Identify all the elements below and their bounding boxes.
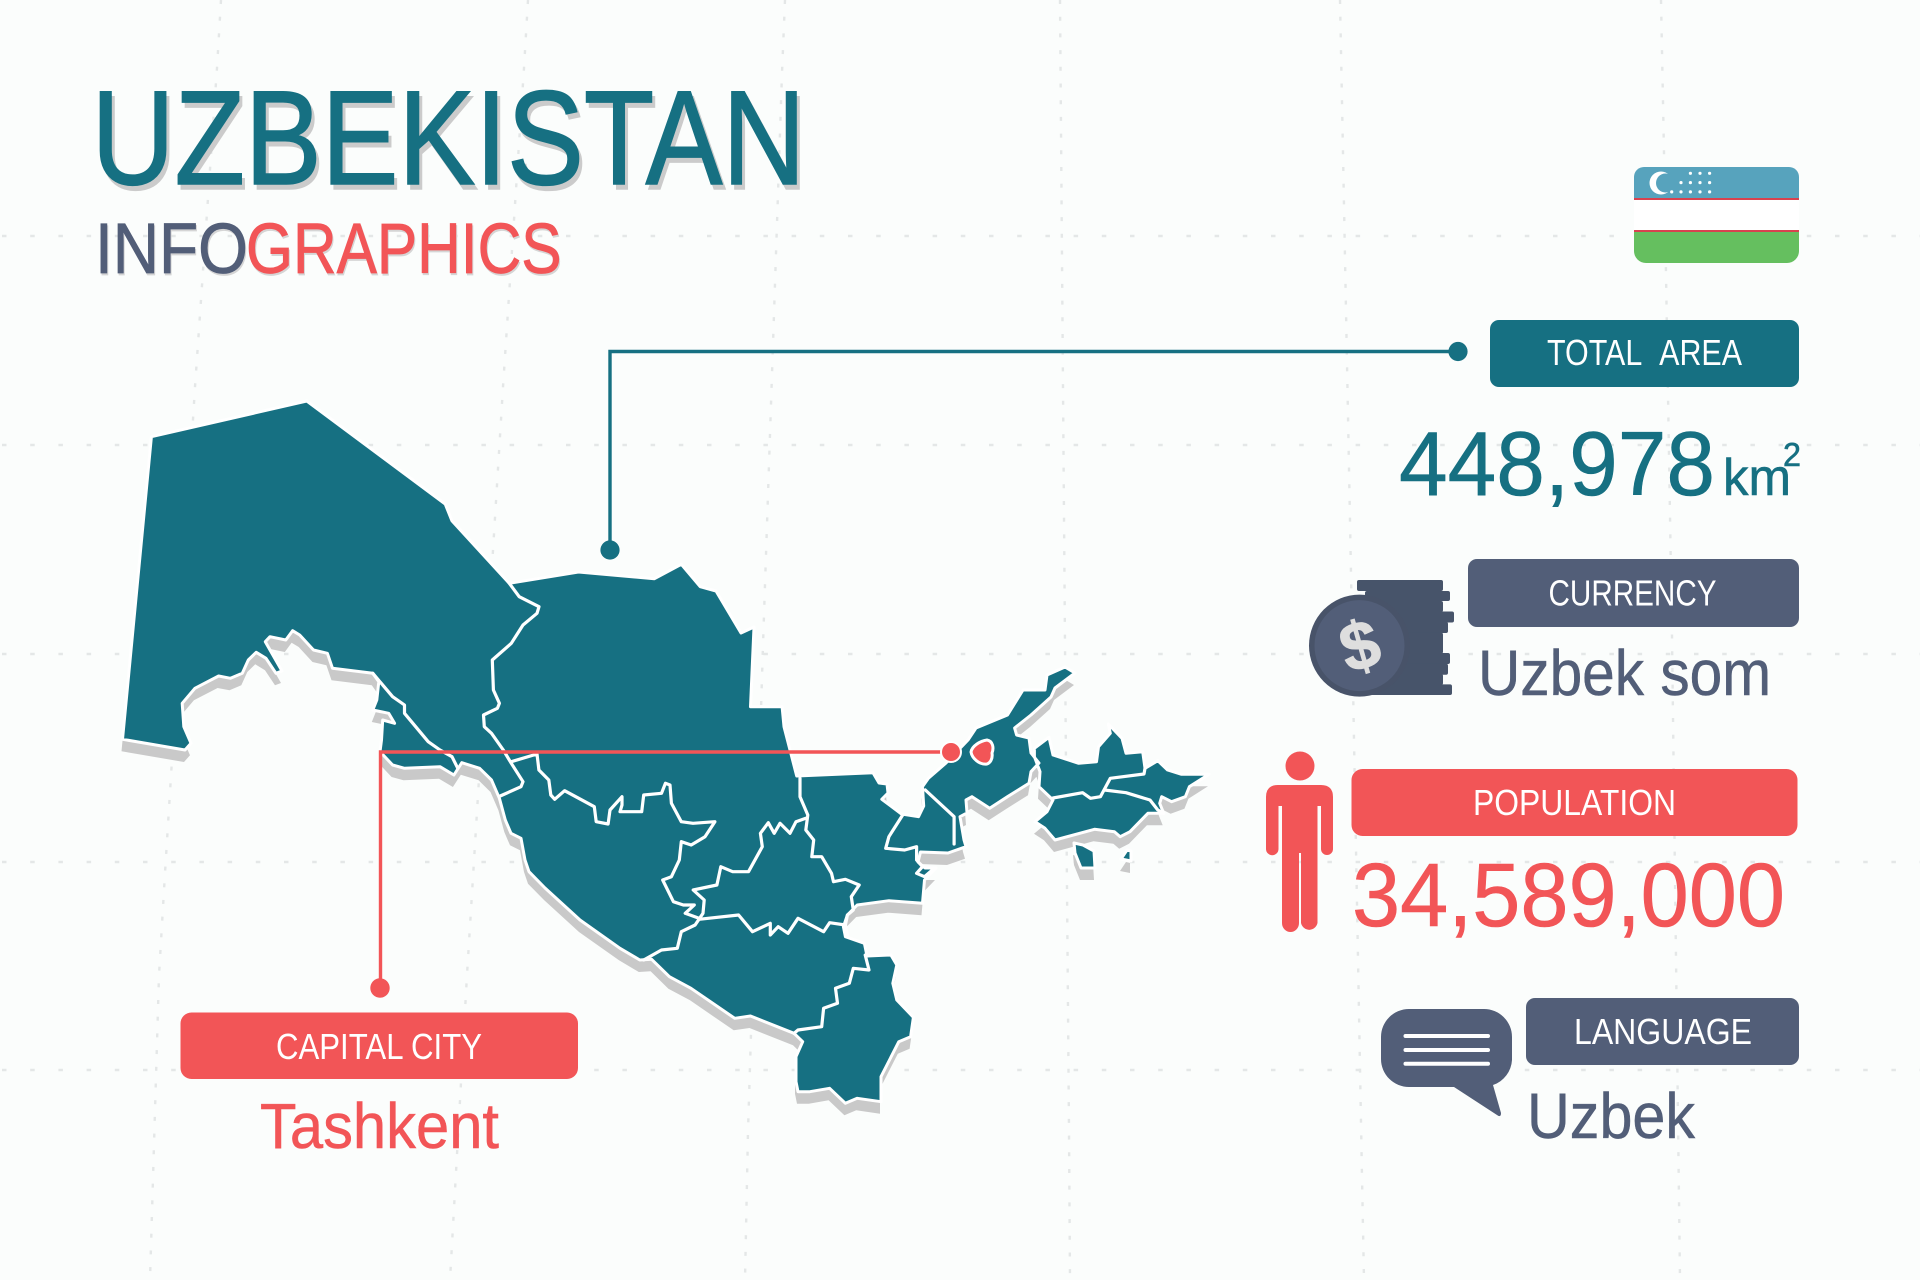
icon: coins: $	[1331, 604, 1389, 688]
label: capital city: CAPITAL CITY	[276, 1026, 482, 1067]
icon: person	[1266, 752, 1333, 932]
label: language	[1526, 998, 1799, 1065]
label: total area: TOTAL AREA	[1547, 332, 1742, 373]
value: capital city: Tashkent	[260, 1090, 499, 1162]
region borders	[373, 583, 1164, 1033]
label: capital city	[180, 1012, 578, 1079]
Tashkent region highlight	[971, 740, 993, 764]
value: language: Uzbek	[1527, 1080, 1696, 1152]
label: population	[1352, 769, 1798, 836]
map of Uzbekistan	[122, 401, 1209, 1115]
value: currency: Uzbek som	[1478, 637, 1771, 709]
subtitle: INFOGRAPHICS: GRAPHICS	[246, 210, 562, 289]
label: currency: CURRENCY	[1548, 572, 1716, 614]
callout line: total area	[600, 342, 1468, 560]
icon: coins	[1309, 580, 1454, 697]
value: total area: 2	[1783, 436, 1801, 473]
callout line: capital city	[370, 742, 961, 998]
value: total area: 448,978	[1399, 414, 1715, 515]
value: total area: km	[1723, 449, 1791, 507]
icon: speech bubble	[1381, 1009, 1512, 1116]
label: total area	[1490, 320, 1799, 387]
subtitle: INFOGRAPHICS	[95, 210, 562, 289]
label: currency	[1468, 559, 1799, 627]
title: UZBEKISTAN: UZBEKISTAN	[92, 64, 806, 213]
subtitle: INFOGRAPHICS: INFO	[95, 210, 248, 289]
label: population: POPULATION	[1473, 782, 1676, 823]
icon: Uzbekistan flag	[1634, 167, 1799, 263]
label: language: LANGUAGE	[1574, 1011, 1752, 1052]
value: population: 34,589,000	[1352, 846, 1785, 946]
